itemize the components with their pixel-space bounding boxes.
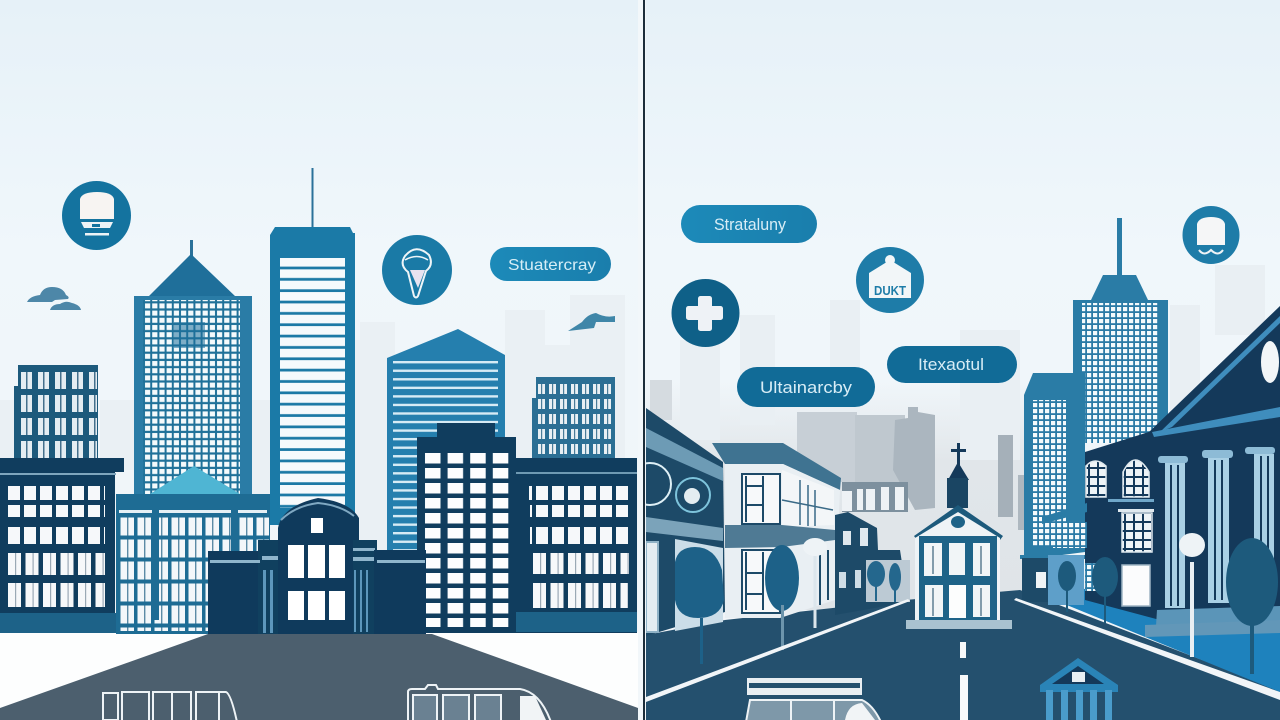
distant arcade bbox=[842, 482, 908, 512]
street and pavement bbox=[646, 590, 1280, 720]
cloud right bbox=[568, 313, 615, 331]
clouds left bbox=[27, 287, 81, 310]
striped tower bbox=[270, 168, 355, 525]
centre divider bbox=[643, 0, 645, 720]
icon: school house: DUKT bbox=[874, 283, 906, 298]
pill label: bottom: Ultainarcby bbox=[760, 378, 853, 397]
icon: train front bbox=[1182, 206, 1240, 264]
hazy background skyline bbox=[646, 265, 1265, 610]
panel: old town street bbox=[629, 205, 1280, 720]
panel: downtown skyline bbox=[0, 168, 640, 720]
temple pediment bbox=[1148, 306, 1280, 437]
arched windows bbox=[1086, 460, 1154, 512]
temple main hall bbox=[1085, 306, 1280, 637]
road centre dashes bbox=[960, 642, 968, 720]
right dark office block bbox=[516, 458, 637, 633]
icon: skull emblem bbox=[382, 235, 452, 305]
tall grid tower bbox=[134, 240, 252, 506]
tree left large bbox=[675, 547, 724, 664]
pill label: bottom bbox=[737, 367, 875, 407]
dark civic block bbox=[208, 498, 426, 634]
rectangular window bbox=[1122, 513, 1152, 552]
pill label: left bbox=[490, 247, 611, 281]
steps bbox=[1156, 606, 1280, 626]
pill label: middle bbox=[887, 346, 1017, 383]
street lamp left bbox=[803, 538, 827, 628]
curb line right bbox=[1014, 598, 1280, 700]
bus with roof rack bbox=[746, 678, 881, 720]
street trees far bbox=[867, 561, 901, 602]
pill label: top bbox=[681, 205, 817, 243]
icon: school house bbox=[856, 247, 924, 313]
street trees right bbox=[1058, 538, 1278, 674]
small temple icon bbox=[1040, 658, 1118, 720]
ground white bbox=[0, 632, 640, 720]
dark window tower bbox=[417, 423, 516, 633]
gabled striped building bbox=[387, 329, 505, 552]
church bbox=[906, 443, 1012, 629]
teal pavilion building bbox=[116, 466, 270, 634]
second tower bbox=[1024, 373, 1085, 560]
columns bbox=[1158, 447, 1275, 608]
van outline bbox=[408, 685, 551, 720]
corner building bbox=[712, 443, 841, 618]
icon: train bbox=[62, 181, 131, 250]
white panel seam bbox=[638, 0, 646, 720]
right-hand tower with spire bbox=[1073, 218, 1168, 443]
road bbox=[0, 634, 638, 720]
street lamp right bbox=[1179, 533, 1205, 657]
small grey-blue building bbox=[532, 377, 615, 459]
blue forecourt bbox=[1030, 585, 1280, 692]
shop building bbox=[646, 408, 725, 635]
pill label: middle: Itexaotul bbox=[918, 355, 984, 374]
tree middle bbox=[765, 545, 799, 650]
icon: medical cross bbox=[672, 279, 740, 347]
bus outline bbox=[103, 692, 237, 720]
dark townhouses bbox=[835, 512, 910, 615]
left dark office block bbox=[0, 458, 124, 633]
curb line left bbox=[646, 599, 910, 702]
white door bbox=[1122, 565, 1150, 606]
pill label: top: Strataluny bbox=[714, 215, 786, 234]
pill label: left: Stuatercray bbox=[508, 257, 596, 274]
side shop bbox=[1020, 503, 1098, 605]
hazy background skyline bbox=[0, 295, 625, 550]
small office building bbox=[14, 365, 98, 460]
